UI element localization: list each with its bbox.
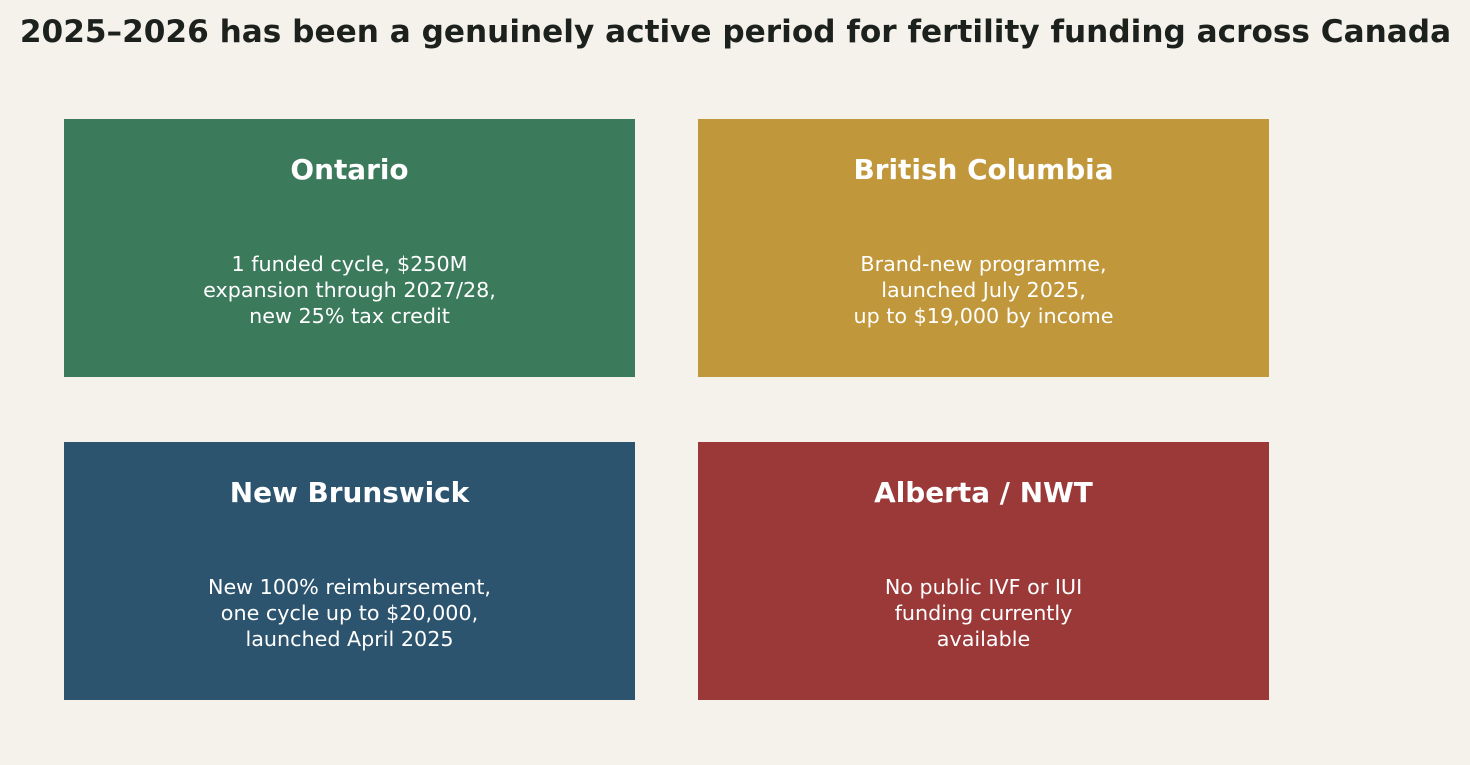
text: British Columbia details: Brand-new programme, xyxy=(860,252,1107,276)
text: New Brunswick details: New 100% reimbursement, xyxy=(208,575,491,599)
heading: Alberta / NWT: Alberta / NWT xyxy=(874,476,1093,509)
text: Ontario details: new 25% tax credit xyxy=(249,304,450,328)
text: British Columbia details xyxy=(853,252,1114,328)
text: Ontario details: expansion through 2027/28, xyxy=(203,278,496,302)
heading: Ontario: Ontario xyxy=(290,153,409,186)
text: New Brunswick details: launched April 2025 xyxy=(245,627,454,651)
text: Alberta / NWT details xyxy=(885,575,1082,651)
panel: Alberta / NWT xyxy=(698,442,1269,700)
panel: British Columbia xyxy=(698,119,1269,377)
text: Ontario details xyxy=(203,252,496,328)
panel: Ontario xyxy=(64,119,635,377)
text: Alberta / NWT details: No public IVF or IUI xyxy=(885,575,1082,599)
text: British Columbia details: up to $19,000 by income xyxy=(853,304,1114,328)
heading: New Brunswick: New Brunswick xyxy=(230,476,469,509)
text: Alberta / NWT details: funding currently xyxy=(895,601,1072,625)
panel: New Brunswick xyxy=(64,442,635,700)
text: New Brunswick details xyxy=(208,575,491,651)
text: Ontario details: 1 funded cycle, $250M xyxy=(232,252,467,276)
text: Alberta / NWT details: available xyxy=(937,627,1030,651)
text: British Columbia details: launched July 2025, xyxy=(881,278,1086,302)
text: New Brunswick details: one cycle up to $20,000, xyxy=(221,601,478,625)
title: 2025–2026 has been a genuinely active period for fertility funding across Canada xyxy=(20,14,1451,50)
heading: British Columbia: British Columbia xyxy=(853,153,1114,186)
